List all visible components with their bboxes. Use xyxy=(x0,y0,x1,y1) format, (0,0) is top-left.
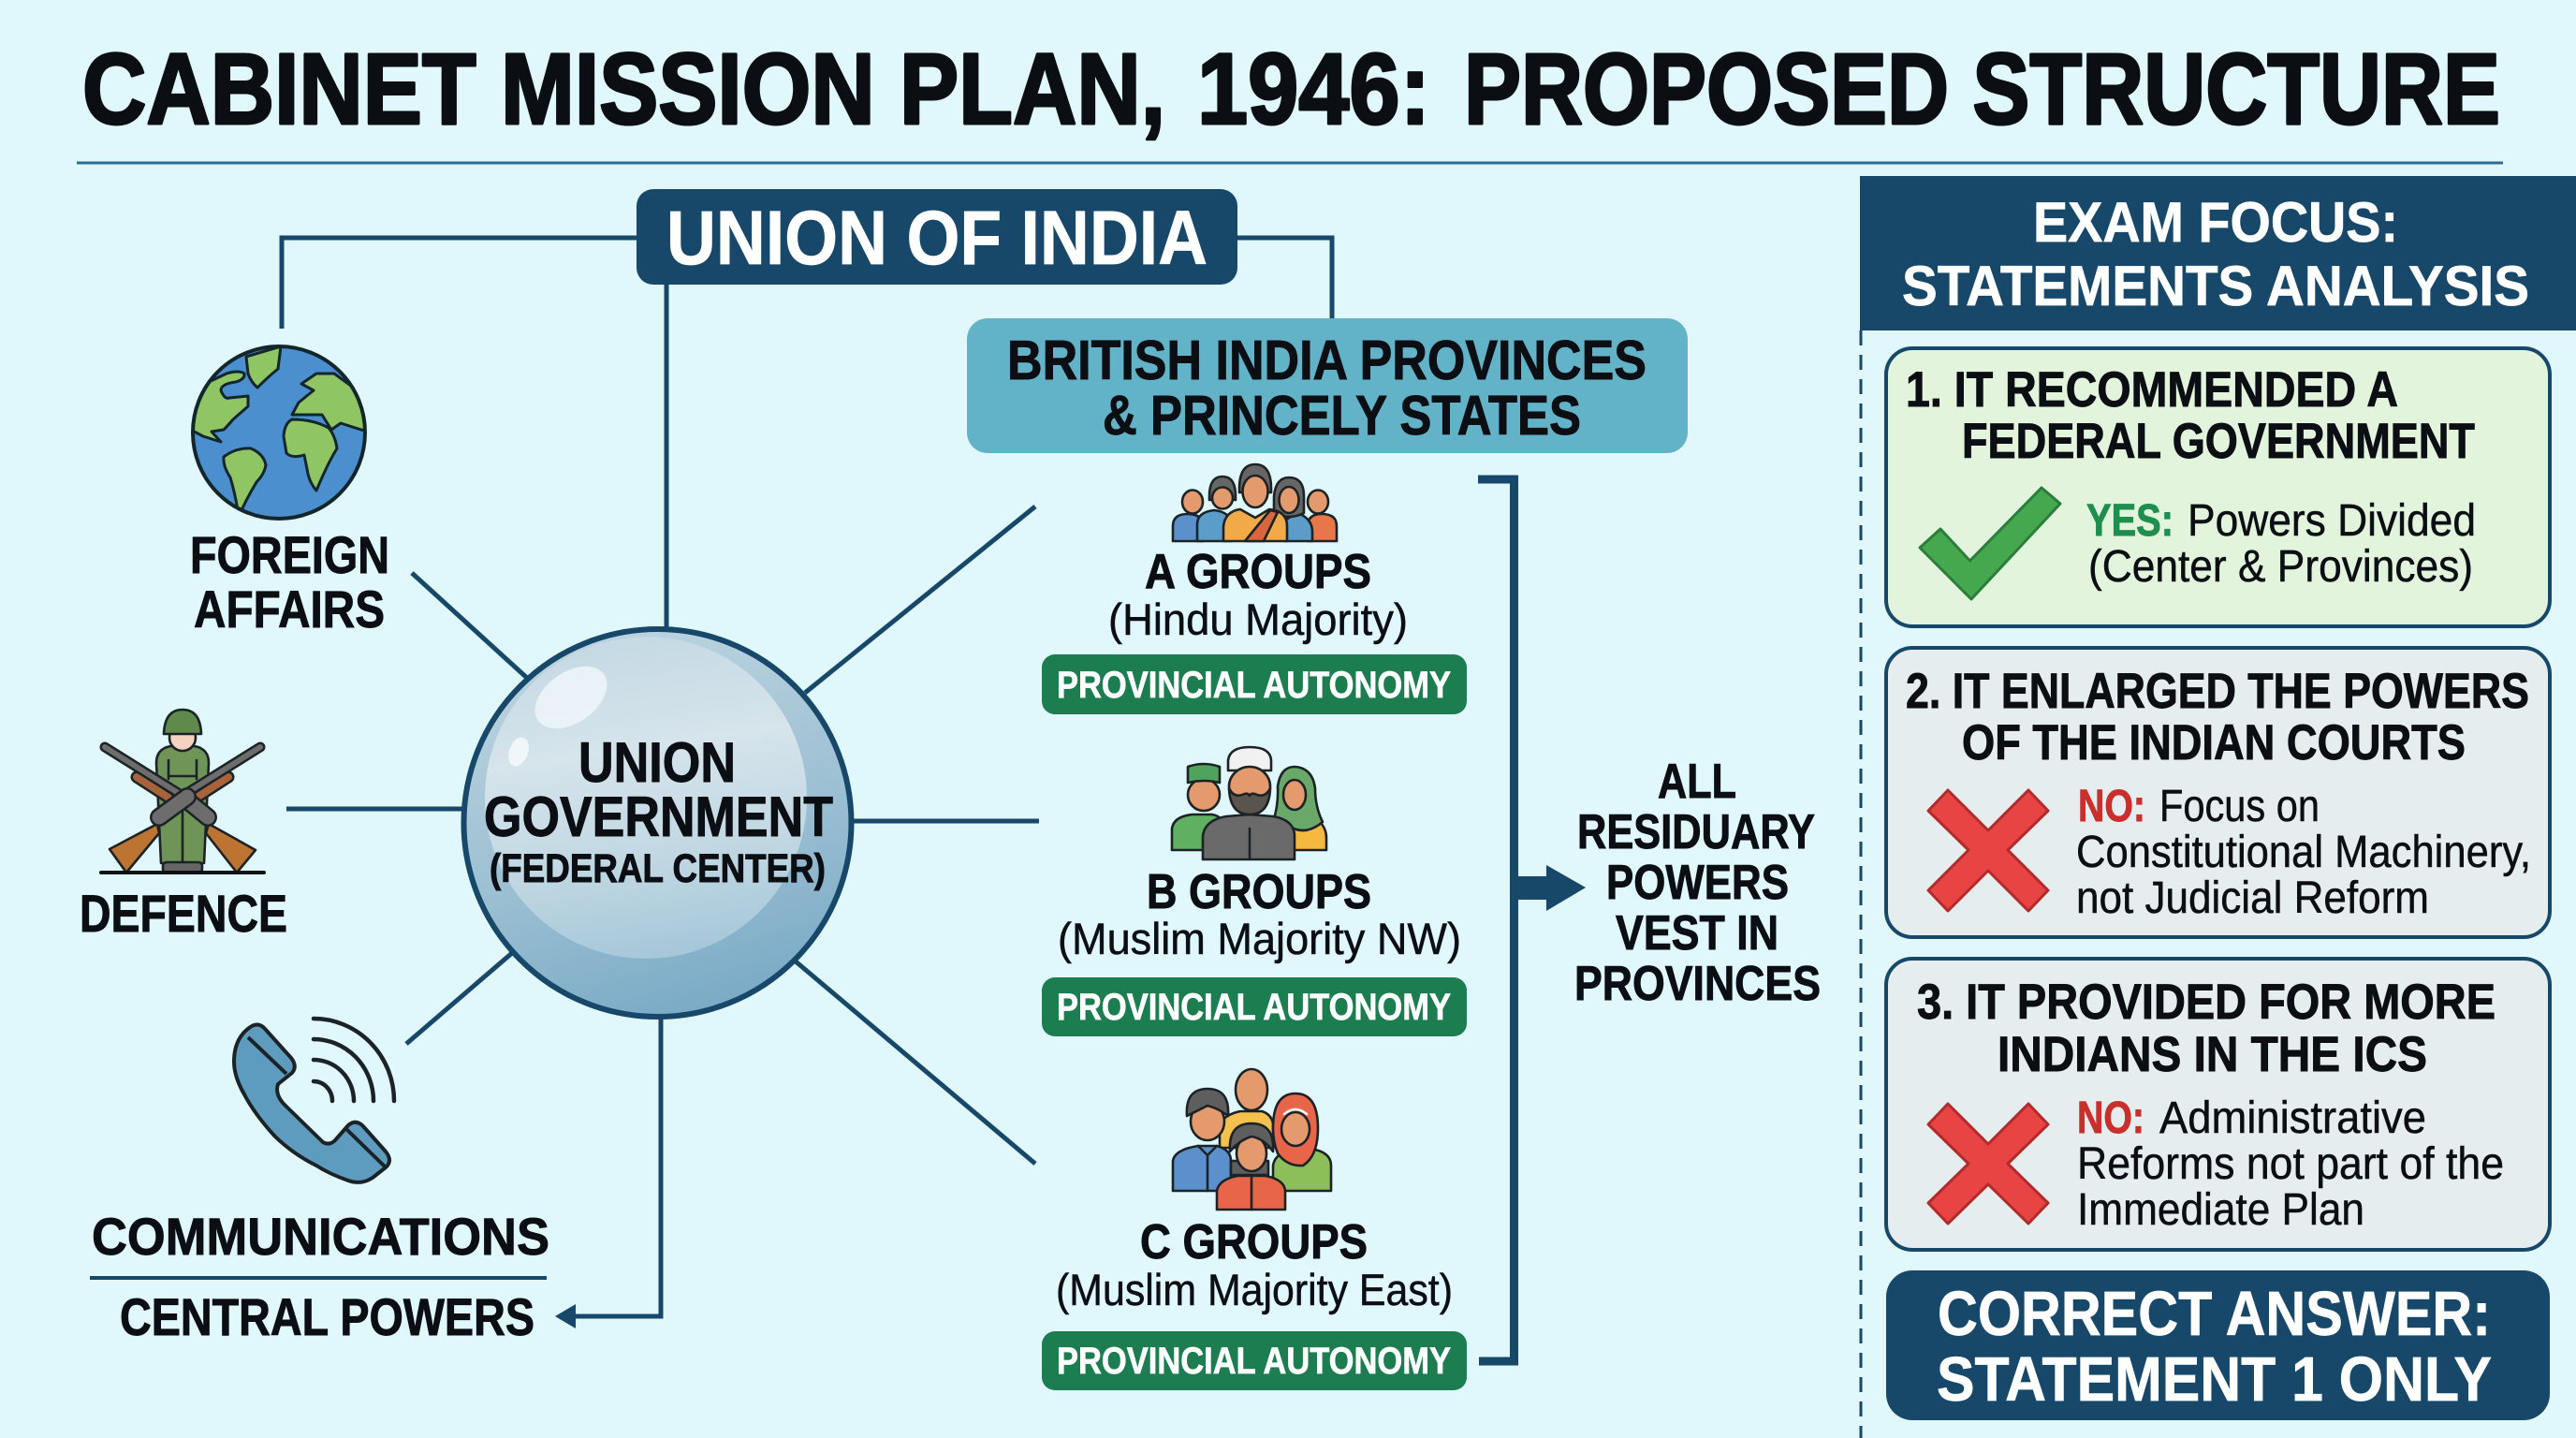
panel: statement 1: 1. IT RECOMMENDED A xyxy=(1906,362,2398,418)
title xyxy=(82,32,2500,145)
verdict: yes xyxy=(2086,496,2476,592)
panel heading: exam focus: STATEMENTS ANALYSIS xyxy=(1902,255,2529,317)
verdict: no: Immediate Plan xyxy=(2077,1185,2364,1235)
title: CABINET MISSION PLAN, xyxy=(82,32,1165,145)
icon: cross mark xyxy=(1928,790,2048,911)
sphere: union government: UNION xyxy=(578,731,736,794)
label: foreign affairs xyxy=(190,525,389,638)
connector lines xyxy=(282,238,1332,1316)
verdict: yes: YES: xyxy=(2086,496,2174,546)
icon: check mark xyxy=(1920,488,2060,599)
badge: provincial autonomy B xyxy=(1042,977,1467,1036)
label: communications: COMMUNICATIONS xyxy=(92,1207,549,1266)
verdict: no: NO: xyxy=(2077,1093,2144,1143)
badge: provincial autonomy C: PROVINCIAL AUTONOMY xyxy=(1057,1341,1451,1382)
heading: union of india: UNION OF INDIA xyxy=(666,196,1208,281)
text block: all residuary powers vest in provinces: VEST IN xyxy=(1616,906,1778,961)
label: C groups: (Muslim Majority East) xyxy=(1056,1265,1453,1314)
panel: statement 3: INDIANS IN THE ICS xyxy=(1998,1027,2427,1082)
label: C groups xyxy=(1056,1215,1453,1314)
badge: provincial autonomy A xyxy=(1042,654,1467,714)
verdict: no: not Judicial Reform xyxy=(2076,873,2429,923)
bracket and arrow: groups to residuary powers xyxy=(1478,479,1586,1361)
sphere: union government: (FEDERAL CENTER) xyxy=(490,846,826,891)
label: central powers: CENTRAL POWERS xyxy=(120,1287,534,1346)
sphere: union government xyxy=(464,629,852,1017)
label: defence: DEFENCE xyxy=(80,884,287,943)
icon: group B people xyxy=(1172,747,1326,859)
arrow: to central powers xyxy=(555,1304,576,1328)
title: 1946: xyxy=(1197,32,1430,145)
verdict: no xyxy=(2076,782,2531,923)
panel: statement 3 xyxy=(1886,959,2550,1250)
label: C groups: C GROUPS xyxy=(1140,1215,1368,1269)
verdict: no: Reforms not part of the xyxy=(2077,1139,2504,1189)
label: A groups: A GROUPS xyxy=(1145,545,1371,599)
panel: statement 1 xyxy=(1886,348,2550,626)
icon: globe xyxy=(187,346,370,519)
icon: telephone xyxy=(234,1019,394,1182)
panel: british india provinces and princely states: BRITISH INDIA PROVINCES xyxy=(1007,330,1647,391)
panel heading: exam focus xyxy=(1860,176,2576,330)
text block: all residuary powers vest in provinces: POWERS xyxy=(1606,856,1789,910)
label: A groups: (Hindu Majority) xyxy=(1108,594,1408,644)
panel: british india provinces and princely states xyxy=(967,318,1688,453)
panel: statement 3: 3. IT PROVIDED FOR MORE xyxy=(1917,975,2496,1030)
label: A groups xyxy=(1108,545,1408,644)
verdict: yes: Powers Divided xyxy=(2188,496,2476,546)
panel heading: exam focus: EXAM FOCUS: xyxy=(2033,191,2398,254)
callout: correct answer xyxy=(1886,1270,2550,1420)
label: B groups xyxy=(1058,865,1461,963)
callout: correct answer: STATEMENT 1 ONLY xyxy=(1937,1344,2492,1415)
text block: all residuary powers vest in provinces: ALL xyxy=(1658,755,1736,809)
verdict: no: Focus on xyxy=(2159,782,2320,831)
badge: provincial autonomy A: PROVINCIAL AUTONOMY xyxy=(1057,665,1451,706)
icon: group A people xyxy=(1173,464,1337,541)
text block: all residuary powers vest in provinces xyxy=(1574,755,1821,1011)
label: B groups: B GROUPS xyxy=(1147,865,1371,919)
label: foreign affairs: FOREIGN xyxy=(190,525,389,584)
label: foreign affairs: AFFAIRS xyxy=(194,580,385,638)
panel: statement 2: OF THE INDIAN COURTS xyxy=(1962,715,2466,770)
badge: provincial autonomy B: PROVINCIAL AUTONOMY xyxy=(1057,987,1451,1028)
icon: soldier with crossed rifles xyxy=(101,710,264,873)
text block: all residuary powers vest in provinces: RESIDUARY xyxy=(1577,805,1815,859)
badge: provincial autonomy C xyxy=(1042,1331,1467,1390)
label: B groups: (Muslim Majority NW) xyxy=(1058,914,1461,963)
verdict: no xyxy=(2077,1093,2504,1235)
panel: statement 2 xyxy=(1886,648,2550,937)
verdict: no: Constitutional Machinery, xyxy=(2076,828,2531,877)
verdict: yes: (Center & Provinces) xyxy=(2088,542,2473,592)
callout: correct answer: CORRECT ANSWER: xyxy=(1938,1279,2491,1349)
sphere: union government: GOVERNMENT xyxy=(484,785,833,848)
icon: group C people xyxy=(1173,1069,1331,1210)
icon: cross mark xyxy=(1928,1104,2048,1224)
verdict: no: NO: xyxy=(2078,782,2145,831)
verdict: no: Administrative xyxy=(2159,1093,2426,1143)
text block: all residuary powers vest in provinces: PROVINCES xyxy=(1574,957,1821,1011)
panel: british india provinces and princely states: & PRINCELY STATES xyxy=(1103,385,1581,447)
panel: statement 1: FEDERAL GOVERNMENT xyxy=(1962,414,2475,469)
